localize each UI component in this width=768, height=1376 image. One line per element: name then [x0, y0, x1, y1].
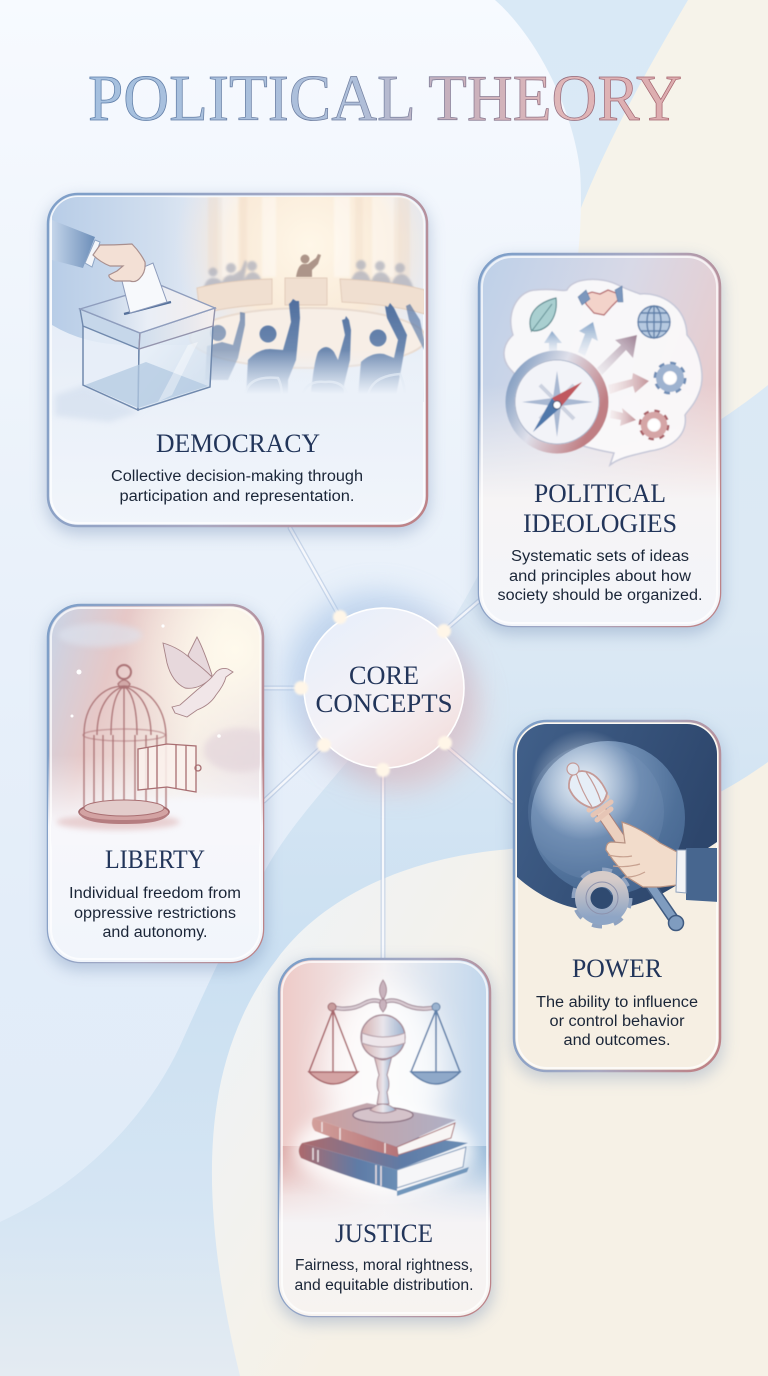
connector nodes [294, 610, 452, 777]
upper book [313, 1103, 456, 1147]
cage [83, 665, 166, 817]
panel: democracy [46, 194, 430, 534]
connector lines [264, 528, 512, 958]
illustration: sceptre and gear [517, 724, 720, 930]
ballot slot [124, 302, 171, 314]
hand [93, 244, 145, 282]
icon: leaf [530, 298, 556, 332]
cage door [138, 744, 201, 792]
desks [197, 278, 425, 314]
icon: compass [510, 355, 604, 449]
right pan [411, 1010, 460, 1084]
illustration: cage and dove [56, 609, 260, 832]
sceptre crown [569, 771, 607, 808]
panel: power [512, 721, 723, 1079]
description: society should be organized. [498, 587, 702, 604]
sceptre shaft [646, 888, 678, 920]
description: and equitable distribution. [294, 1277, 474, 1294]
lower book [302, 1130, 468, 1170]
hub label [316, 661, 452, 718]
finial [380, 980, 386, 1012]
description [111, 468, 363, 505]
description: and outcomes. [564, 1032, 670, 1049]
scale base [353, 1108, 413, 1122]
ballot paper [121, 263, 167, 313]
voters raising hands [205, 299, 424, 396]
blindfolded figure [374, 1056, 392, 1104]
sleeve [52, 220, 95, 268]
illustration: compass and ideas [504, 279, 702, 465]
cage base [79, 802, 169, 822]
description [69, 885, 241, 941]
background assembly [203, 260, 414, 290]
hand [606, 822, 677, 887]
icon: handshake [578, 286, 623, 315]
description: oppressive restrictions [74, 905, 236, 922]
icon: red gear [641, 412, 667, 438]
heading: DEMOCRACY [156, 429, 320, 458]
thought cloud [504, 279, 702, 465]
sceptre collar [589, 797, 611, 820]
scale beam [332, 1000, 436, 1009]
description: Fairness, moral rightness, [295, 1257, 473, 1274]
description [536, 994, 698, 1049]
panel: justice [277, 959, 493, 1323]
heading: POLITICAL [534, 479, 666, 508]
heading: JUSTICE [335, 1219, 433, 1248]
left pan [309, 1010, 358, 1084]
sparkles [70, 624, 221, 738]
arrows [544, 322, 649, 426]
title: POLITICAL THEORY [88, 62, 682, 135]
icon: globe [638, 306, 670, 338]
dove [163, 637, 233, 717]
description: and principles about how [509, 568, 692, 585]
description: The ability to influence [536, 994, 698, 1011]
heading: IDEOLOGIES [523, 509, 677, 538]
hub label: CORE [349, 661, 419, 690]
gear [576, 872, 628, 924]
ballot box body [83, 325, 139, 410]
box shadow [55, 386, 134, 422]
speaker [296, 254, 321, 277]
description: Systematic sets of ideas [511, 548, 689, 565]
hub label: CONCEPTS [316, 689, 452, 718]
icon: blue gear [656, 364, 684, 392]
description [498, 548, 702, 604]
heading: POWER [572, 954, 663, 983]
description: participation and representation. [120, 488, 354, 505]
description: Individual freedom from [69, 885, 241, 902]
illustration: scales and books [294, 980, 474, 1196]
panel: political ideologies [477, 254, 722, 634]
ballot box lid [80, 309, 140, 349]
description [294, 1257, 474, 1294]
central hub: core concepts [286, 592, 480, 790]
suit sleeve [686, 848, 720, 902]
illustration: ballot box and assembly [52, 197, 430, 422]
heading [523, 479, 677, 538]
description: or control behavior [550, 1013, 684, 1030]
description: Collective decision-making through [111, 468, 363, 485]
description: and autonomy. [102, 924, 208, 941]
heading: LIBERTY [105, 845, 205, 874]
assembly table [190, 308, 426, 368]
panel: liberty [38, 602, 274, 978]
